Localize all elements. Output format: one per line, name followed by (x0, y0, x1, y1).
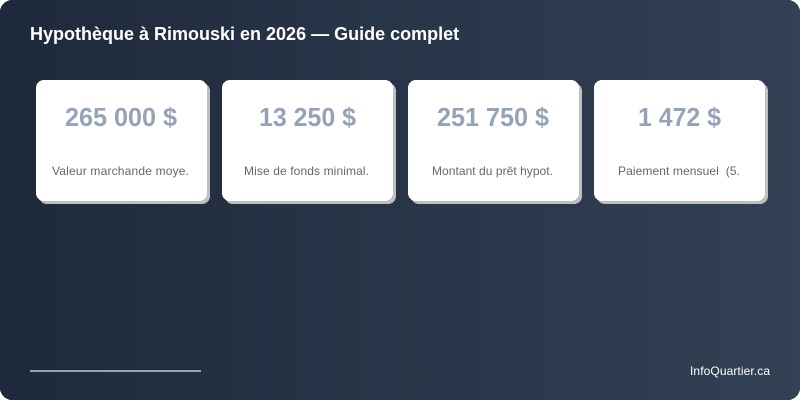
value: paiement mensuel: 1 472 $ (638, 102, 722, 132)
value: valeur marchande: 265 000 $ (65, 102, 178, 132)
panel: valeur marchande (36, 80, 210, 204)
panel: montant du prêt (408, 80, 582, 204)
label: mise de fonds: Mise de fonds minimal. (244, 164, 369, 178)
panel: paiement mensuel (594, 80, 768, 204)
title: Hypothèque à Rimouski en 2026 — Guide complet (30, 24, 459, 44)
value: montant du prêt: 251 750 $ (437, 102, 550, 132)
label: montant du prêt: Montant du prêt hypot. (432, 164, 553, 178)
footer source: InfoQuartier.ca (690, 364, 770, 378)
panel: mise de fonds (222, 80, 396, 204)
footer accent line (30, 370, 201, 372)
label: paiement mensuel: Paiement mensuel (5. (618, 164, 740, 178)
label: valeur marchande: Valeur marchande moye. (52, 164, 189, 178)
value: mise de fonds: 13 250 $ (259, 102, 357, 132)
